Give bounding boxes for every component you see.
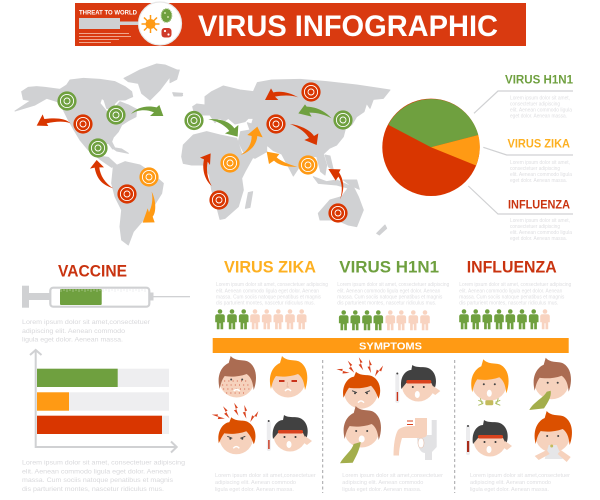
face: sneezing with tissue — [535, 411, 572, 462]
symptom text three: ligula eget dolor. Aenean massa. — [470, 487, 549, 493]
influenza text — [459, 282, 572, 306]
influenza people — [459, 309, 550, 329]
symptom text three — [470, 473, 570, 493]
zika text: consectetuer adipiscing — [510, 166, 560, 172]
bar tracks — [37, 369, 169, 434]
header banner — [75, 2, 526, 46]
symptom text one: Lorem ipsum dolor sit amet,consectetuer — [215, 473, 316, 479]
vaccine text — [22, 319, 151, 344]
column: virus zika — [215, 258, 328, 329]
influenza text: eget dolor. Aenean massa. — [510, 236, 567, 242]
toilet — [417, 420, 437, 460]
zika text: Lorem ipsum dolor sit amet, — [510, 160, 570, 166]
zika text: elit. Aenean commodo ligula — [510, 172, 572, 178]
influenza text: massa. Cum sociis natoque penatibus et magnis — [459, 294, 565, 300]
icon: syringe — [22, 286, 190, 308]
pie chart — [382, 99, 480, 196]
bar values — [37, 369, 162, 434]
h1n1 text: Lorem ipsum dolor sit amet, — [510, 96, 570, 102]
h1n1 text — [510, 96, 572, 120]
influenza text: elit. Aenean commodo ligula — [510, 230, 572, 236]
vomit — [529, 391, 551, 410]
face: fever — [273, 415, 312, 452]
orange virus — [142, 15, 160, 33]
h1n1 text: dis parturient montes, nascetur ridiculus mus. — [337, 300, 436, 306]
influenza text: Lorem ipsum dolor sit amet, consectetuer adipiscing — [459, 282, 572, 288]
header small text — [79, 33, 131, 43]
symptom text two: ligula eget dolor. Aenean massa. — [342, 487, 421, 493]
symptoms dividers — [323, 360, 455, 493]
symptoms: column two — [336, 357, 443, 493]
face: rash — [219, 356, 256, 398]
h1n1 text: elit. Aenean commodo ligula — [510, 108, 572, 114]
influenza text: elit. Aenean commodo ligula eget dolor. Aenean — [459, 288, 563, 294]
zika text — [216, 282, 328, 306]
red markers — [73, 82, 348, 223]
chart text: dis parturient montes, nascetur ridiculus mus. — [22, 486, 164, 493]
face: vomiting — [529, 358, 571, 410]
influenza text: dis parturient montes, nascetur ridiculus mus. — [459, 300, 558, 306]
pain marks — [407, 421, 413, 424]
influenza text — [510, 218, 572, 242]
outbreak markers — [57, 82, 353, 223]
symptom text one — [215, 473, 316, 493]
h1n1 text: eget dolor. Aenean massa. — [510, 114, 567, 120]
world map — [15, 64, 390, 245]
legend: virus h1n1: VIRUS H1N1 — [505, 74, 574, 86]
vomit — [340, 442, 361, 463]
spread arrows — [37, 88, 343, 223]
zika text: Lorem ipsum dolor sit amet, consectetuer adipiscing — [216, 282, 328, 288]
vaccine text: adipiscing elit. Aenean commodo — [22, 328, 125, 335]
vaccine text: Lorem ipsum dolor sit amet,consectetuer — [22, 319, 151, 326]
h1n1 text: massa. Cum sociis natoque penatibus et magnis — [337, 294, 443, 300]
symptom text three: adipiscing elit. Aenean commodo — [470, 480, 551, 486]
chart text: Lorem ipsum dolor sit amet, consectetuer adipiscing — [22, 460, 185, 466]
red virus — [162, 28, 172, 38]
throat — [485, 400, 493, 405]
symptom text one: adipiscing elit. Aenean commodo — [215, 480, 296, 486]
legend: influenza: INFLUENZA — [508, 200, 570, 212]
chart text: massa. Cum sociis natoque penatibus et magnis — [22, 477, 174, 484]
orange markers — [139, 153, 318, 187]
influenza text: Lorem ipsum dolor sit amet, — [510, 218, 570, 224]
icon: thermometer — [267, 420, 271, 451]
chart text: elit. Aenean commodo ligula eget dolor. Aenean — [22, 468, 171, 476]
column: influenza: INFLUENZA — [467, 258, 557, 277]
zika text: elit. Aenean commodo ligula eget dolor. Aenean — [216, 288, 319, 294]
bar chart — [30, 350, 177, 452]
column: virus h1n1 — [337, 258, 450, 330]
face: sore throat — [471, 359, 509, 405]
icon: man on toilet — [394, 418, 437, 460]
icon: thermometer — [395, 372, 399, 403]
main title: VIRUS INFOGRAPHIC — [198, 10, 498, 43]
body — [394, 418, 427, 456]
header label: threat to world: THREAT TO WORLD — [79, 10, 137, 16]
green markers — [57, 91, 353, 158]
eurasia africa australia — [170, 70, 390, 235]
symptom text three: Lorem ipsum dolor sit amet,consectetuer — [470, 473, 570, 479]
virus columns — [215, 258, 572, 330]
tissue and hands — [545, 445, 563, 459]
symptom text one: ligula eget dolor. Aenean massa. — [215, 487, 294, 493]
pie legend — [468, 74, 574, 242]
symptoms heading: SYMPTOMS — [359, 341, 422, 353]
face: vomiting — [340, 406, 381, 463]
arrows over the americas — [37, 105, 163, 223]
h1n1 text: consectetuer adipiscing — [510, 102, 560, 108]
h1n1 text — [337, 282, 450, 306]
zika people — [215, 309, 307, 329]
zika text: massa. Cum sociis natoque penatibus et magnis — [216, 294, 321, 300]
symptoms: column one — [212, 356, 316, 493]
zika text: eget dolor. Aenean massa. — [510, 178, 567, 184]
face: fever — [401, 365, 440, 402]
arrows over eurasia africa australia — [200, 88, 343, 199]
vaccine text: ligula eget dolor. Aenean massa. — [22, 337, 123, 344]
face: fever — [473, 420, 512, 456]
symptoms banner — [213, 338, 569, 353]
column: influenza — [459, 258, 572, 329]
influenza text: consectetuer adipiscing — [510, 224, 560, 230]
h1n1 people — [339, 310, 430, 330]
symptom text two: Lorem ipsum dolor sit amet,consectetuer — [342, 473, 443, 479]
symptom text two — [342, 473, 443, 493]
face: headache — [212, 403, 261, 454]
americas and greenland — [15, 64, 183, 245]
column: virus zika: VIRUS ZIKA — [224, 258, 316, 277]
face: red eyes — [270, 356, 307, 398]
magnifier with viruses — [138, 2, 182, 45]
h1n1 text: elit. Aenean commodo ligula eget dolor. Aenean — [337, 288, 441, 294]
column: virus h1n1: VIRUS H1N1 — [339, 258, 439, 277]
symptoms: column three — [466, 358, 572, 493]
face: headache — [336, 357, 386, 409]
chart text — [22, 460, 185, 493]
vaccine heading: VACCINE — [58, 263, 127, 281]
legend: virus zika: VIRUS ZIKA — [508, 138, 570, 150]
symptom text two: adipiscing elit. Aenean commodo — [342, 480, 424, 486]
icon: thermometer — [466, 425, 470, 455]
zika text — [510, 160, 572, 184]
green virus — [162, 9, 172, 22]
magnifier handle — [79, 18, 140, 29]
h1n1 text: Lorem ipsum dolor sit amet, consectetuer adipiscing — [337, 282, 450, 288]
chart axes — [30, 350, 177, 452]
zika text: dis parturient montes, nascetur ridiculus mus. — [216, 300, 315, 306]
leader lines — [468, 91, 573, 214]
vaccine panel — [22, 263, 190, 493]
